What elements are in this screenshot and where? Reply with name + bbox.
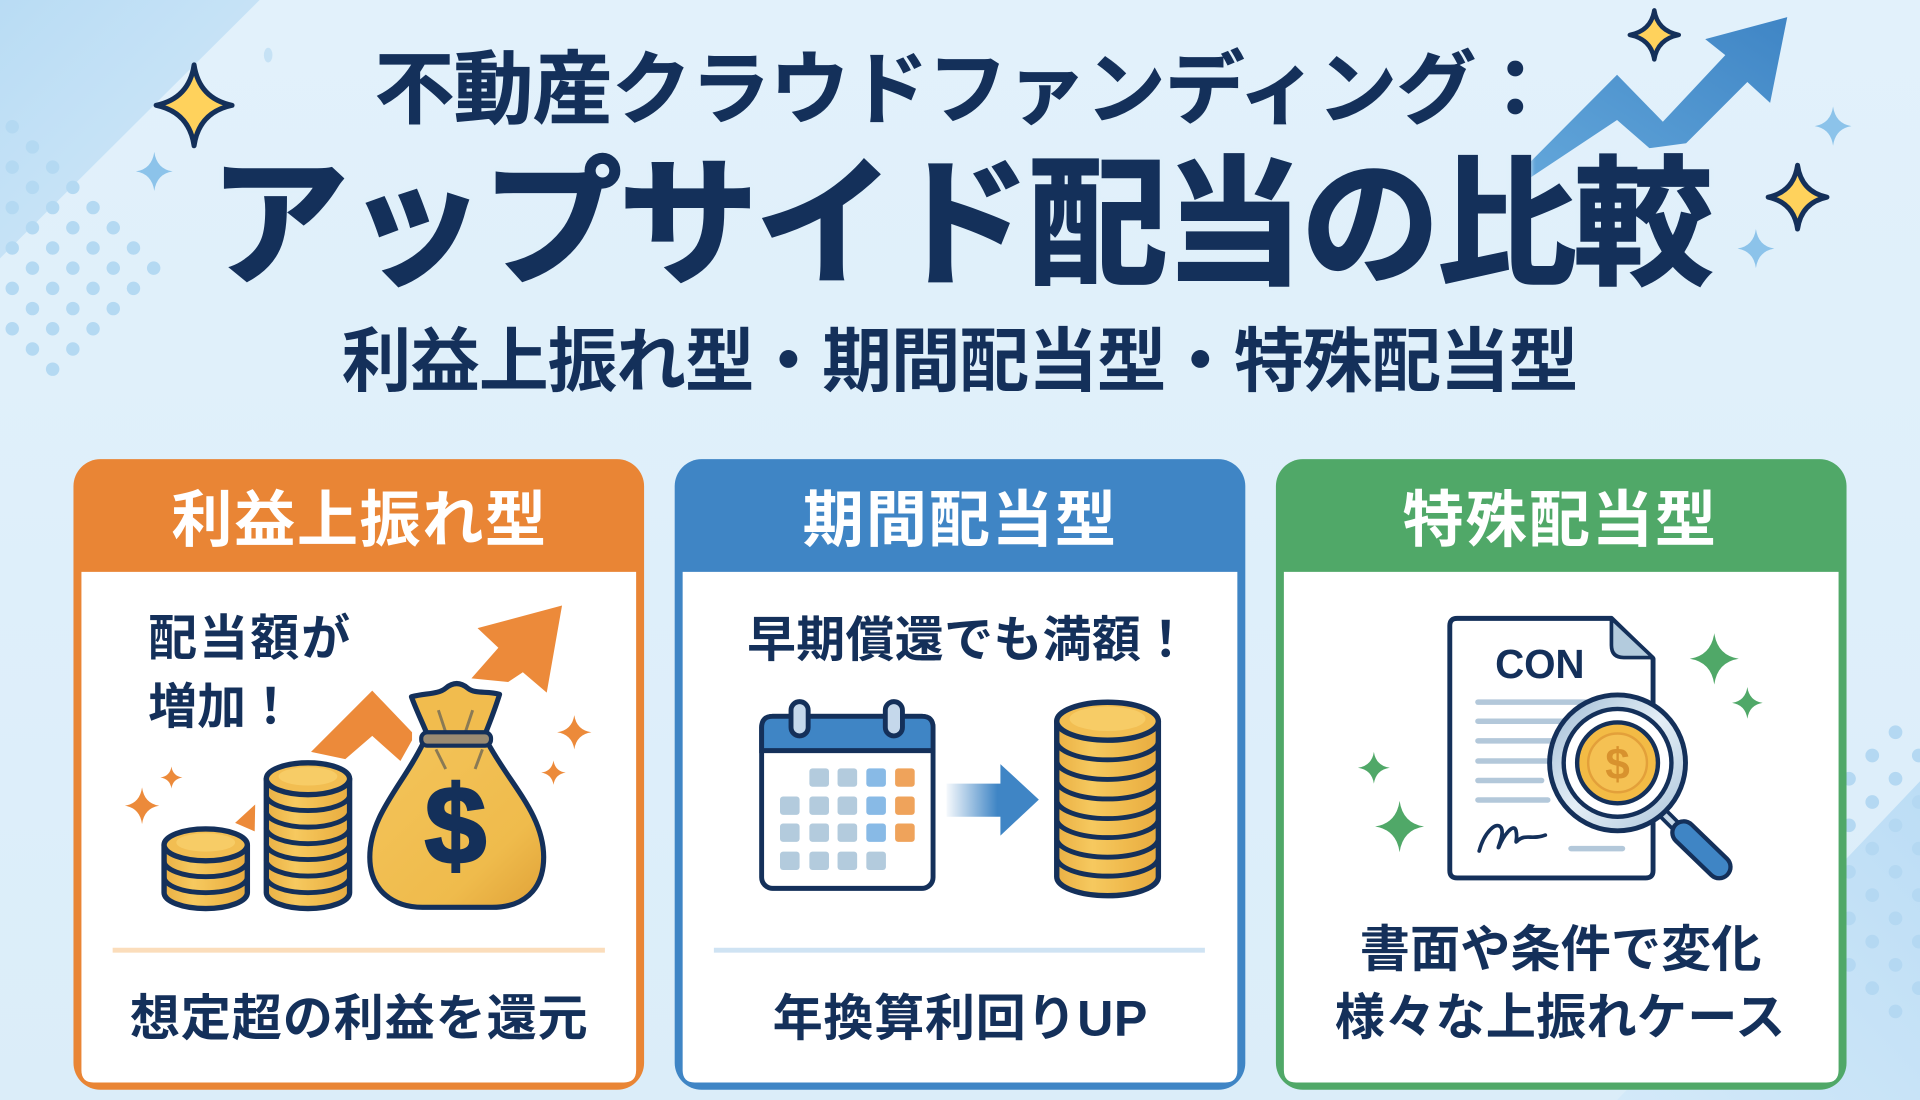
panel frame green — [1276, 459, 1847, 1090]
icon: blue sparkle left — [136, 152, 173, 191]
icon: contract document: CON — [1495, 641, 1584, 687]
icon: calendar — [762, 702, 933, 888]
icon: blue sparkle right top — [1815, 107, 1851, 146]
panel body — [683, 572, 1237, 1082]
dot pattern: bottom right — [1842, 725, 1920, 1018]
background corner shape: top left — [0, 0, 260, 258]
icon: gold sparkle top right — [1630, 10, 1679, 59]
panel summary text: 年換算利回りUP — [773, 990, 1147, 1046]
callout text: 早期償還でも満額！ — [747, 613, 1190, 667]
icon: contract document — [1450, 618, 1653, 878]
icon: money bag: $ — [425, 764, 486, 887]
panel heading: 利益上振れ型 — [171, 486, 546, 554]
callout text: 配当額が — [148, 612, 350, 666]
callout text — [148, 612, 350, 735]
panel heading: 期間配当型 — [803, 486, 1116, 554]
icon: small coin stack — [164, 829, 247, 909]
title: first line: 不動産クラウドファンディング： — [375, 45, 1555, 134]
panel body — [81, 572, 636, 1082]
panel summary text: 想定超の利益を還元 — [130, 990, 588, 1046]
icon: money bag — [370, 684, 544, 907]
icon: gold sparkle right — [1768, 165, 1827, 229]
icon: orange sparkles — [125, 715, 591, 824]
panel summary text: 書面や条件で変化 — [1360, 922, 1761, 978]
panel: 利益上振れ型 — [73, 459, 644, 1090]
panel body — [1284, 572, 1839, 1082]
icon: rising blue arrow — [1529, 17, 1787, 178]
icon: magnifying glass with coin: $ — [1605, 740, 1630, 789]
panel heading: 特殊配当型 — [1403, 486, 1716, 554]
panel summary text — [1335, 922, 1785, 1046]
icon: tall coin stack — [266, 763, 350, 909]
panel: 期間配当型 — [675, 459, 1245, 1090]
subtitle: 利益上振れ型・期間配当型・特殊配当型 — [342, 323, 1578, 401]
background corner shape: bottom right — [1616, 781, 1920, 1100]
panel frame orange — [73, 459, 644, 1090]
panel summary text: 様々な上振れケース — [1335, 990, 1785, 1046]
arrow: calendar to coins — [947, 764, 1039, 836]
title: main heading: アップサイド配当の比較 — [209, 147, 1713, 303]
icon: gold sparkle left — [156, 65, 232, 146]
icon: coin stack — [1057, 702, 1158, 896]
icon: green sparkles — [1358, 633, 1763, 852]
dot pattern: top left — [6, 48, 272, 376]
icon: blue sparkle right bottom — [1738, 229, 1774, 268]
icon: orange rising arrow — [235, 606, 562, 831]
icon: magnifying glass with coin — [1550, 695, 1719, 867]
callout text: 増加！ — [148, 681, 295, 735]
panel frame blue — [675, 459, 1245, 1090]
panel: 特殊配当型 — [1276, 459, 1847, 1090]
